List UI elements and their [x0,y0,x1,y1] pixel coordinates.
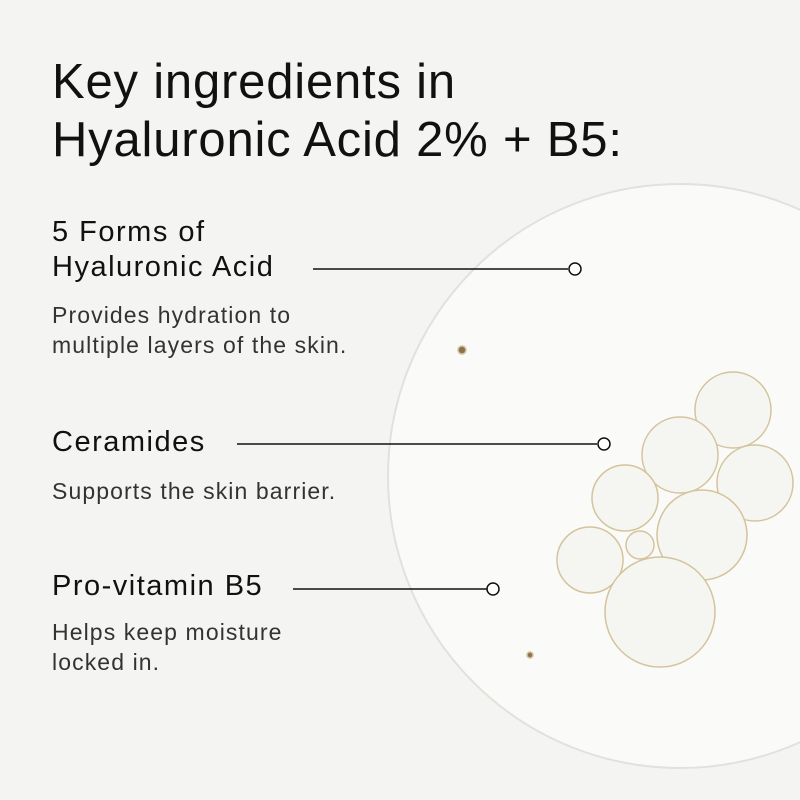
text: hyaluronic: Provides hydration to [52,302,291,328]
heading: ceramides: Ceramides [52,426,206,458]
text: ceramides: Supports the skin barrier. [52,478,336,504]
heading: hyaluronic: Hyaluronic Acid [52,251,274,283]
text: hyaluronic [52,302,347,358]
text: b5: Helps keep moisture [52,619,283,645]
heading: hyaluronic [52,216,274,283]
text: b5 [52,619,283,675]
heading: hyaluronic: 5 Forms of [52,216,206,248]
heading: b5: Pro-vitamin B5 [52,570,263,602]
text: hyaluronic: multiple layers of the skin. [52,332,347,358]
title: Key ingredients in [52,55,456,109]
title [52,55,623,167]
bubbles [458,346,793,667]
text: b5: locked in. [52,649,160,675]
title: Hyaluronic Acid 2% + B5: [52,113,623,167]
